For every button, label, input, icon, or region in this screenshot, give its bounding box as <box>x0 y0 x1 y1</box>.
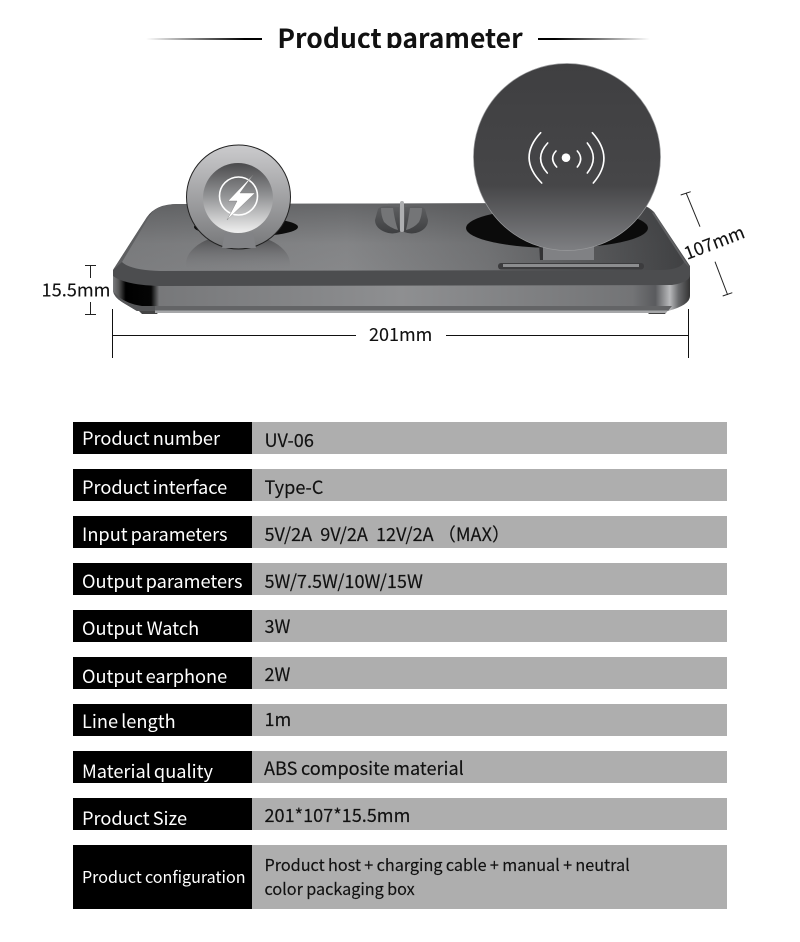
watch stand foot <box>222 232 256 248</box>
row: output watch: Output Watch <box>82 615 199 641</box>
row: input parameters <box>73 516 727 548</box>
dimension: height 15.5mm <box>42 266 111 314</box>
row: product number <box>73 422 727 454</box>
row: product configuration: Product configuration <box>82 864 246 888</box>
dark chamfer <box>113 203 690 286</box>
left watch hole <box>194 218 298 236</box>
rubber feet <box>138 310 668 314</box>
earphone holder <box>375 201 428 234</box>
row: line length: Line length <box>82 708 176 734</box>
row: output parameters: Output parameters <box>82 568 243 594</box>
row: product configuration <box>73 845 727 909</box>
row: product number: UV-06 <box>264 427 314 453</box>
row: output watch <box>73 610 727 642</box>
dimension: height 15.5mm: 15.5mm <box>42 276 111 302</box>
row: output parameters <box>73 563 727 595</box>
top surface <box>122 203 684 271</box>
watch stand shadow <box>188 240 288 258</box>
row: product size <box>73 798 727 830</box>
phone stand hinge <box>543 246 594 260</box>
right phone hole <box>466 208 648 248</box>
row: product interface: Product interface <box>82 474 227 500</box>
row: product size: 201*107*15.5mm <box>264 802 410 828</box>
phone stand slot <box>498 263 644 270</box>
dimension: width 201mm: 201mm <box>369 321 432 347</box>
row: input parameters: Input parameters <box>82 521 228 547</box>
row: material quality: ABS composite material <box>264 755 464 781</box>
row: material quality <box>73 751 727 783</box>
row: product configuration: Product host + charging cable + manual + neutral <box>264 852 630 876</box>
row: output earphone: Output earphone <box>82 663 227 689</box>
dimension: depth 107mm: 107mm <box>680 219 748 266</box>
row: output parameters: 5W/7.5W/10W/15W <box>264 568 423 594</box>
row: product number: Product number <box>82 425 220 451</box>
row: output earphone: 2W <box>264 661 290 687</box>
dimension: width 201mm <box>112 309 688 358</box>
wireless charging disc <box>474 64 660 250</box>
row: product interface <box>73 469 727 501</box>
dimension: depth 107mm <box>680 192 748 296</box>
row: product configuration: color packaging box <box>264 876 415 900</box>
watch charging disc <box>186 145 290 249</box>
row: output watch: 3W <box>264 613 290 639</box>
row: input parameters: 5V/2A 9V/2A 12V/2A （MAX） <box>264 521 510 547</box>
row: line length: 1m <box>264 706 291 732</box>
charger base <box>113 64 690 314</box>
product illustration with dimensions <box>42 63 748 358</box>
row: line length <box>73 704 727 736</box>
icon: wireless signal <box>529 133 604 183</box>
icon: lightning bolt <box>220 175 258 220</box>
side silver band <box>113 268 690 311</box>
row: product interface: Type-C <box>264 474 323 500</box>
row: output earphone <box>73 657 727 689</box>
